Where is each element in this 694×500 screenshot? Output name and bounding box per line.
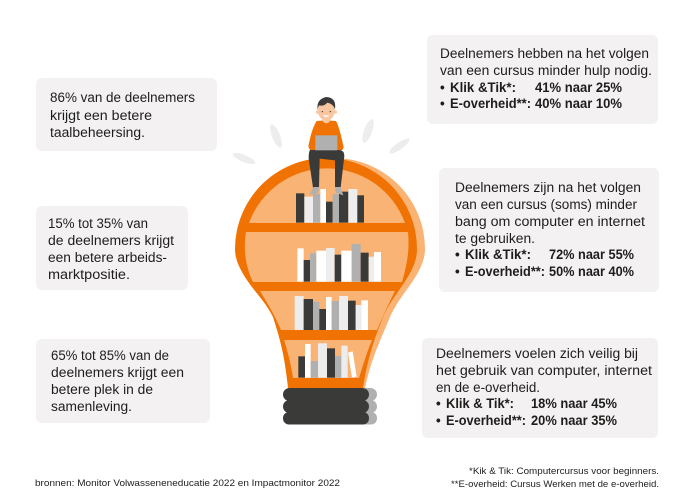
panel: taalbeheersing <box>36 78 217 151</box>
panel: minder hulp nodig: • <box>440 80 445 95</box>
illustration: light bulb bookshelf <box>235 158 425 424</box>
panel: plek in de samenleving: samenleving. <box>51 399 132 414</box>
panel: arbeidsmarktpositie: een betere arbeids- <box>48 250 167 265</box>
panel: minder bang: 72% naar 55% <box>549 247 634 262</box>
panel: veilig: het gebruik van computer, internet <box>436 363 652 378</box>
head <box>318 101 335 121</box>
footnotes: *Kik & Tik: Computercursus voor beginners. <box>469 466 659 477</box>
panel: arbeidsmarktpositie: marktpositie. <box>48 267 130 282</box>
panel: veilig: 20% naar 35% <box>531 413 617 428</box>
bulb screw base <box>283 388 377 424</box>
panel: taalbeheersing: krijgt een betere <box>50 108 152 123</box>
panel: minder bang: • <box>455 264 460 279</box>
panel: minder bang: E-overheid**: <box>465 264 545 279</box>
panel: plek in de samenleving: betere plek in de <box>51 382 153 397</box>
panel: minder bang: Klik &Tik*: <box>465 247 531 262</box>
source note: bronnen: Monitor Volwasseneneducatie 2022 en Impactmonitor 2022 <box>35 478 340 489</box>
footnotes <box>451 466 659 490</box>
neck and ears <box>316 110 319 114</box>
panel: minder bang <box>439 168 659 292</box>
hair <box>317 97 335 110</box>
panel: minder hulp nodig: 41% naar 25% <box>535 80 622 95</box>
panel: minder bang: van een cursus (soms) minder <box>455 197 637 212</box>
panel: arbeidsmarktpositie: de deelnemers krijgt <box>48 233 174 248</box>
panel: arbeidsmarktpositie: 15% tot 35% van <box>48 216 148 231</box>
books: lower shelves <box>295 244 381 378</box>
illustration: person with laptop <box>308 97 344 195</box>
panel: minder hulp nodig: E-overheid**: <box>450 96 531 111</box>
panel: minder bang: • <box>455 247 460 262</box>
panel: veilig <box>422 338 658 438</box>
panel: minder hulp nodig: Deelnemers hebben na het volgen <box>440 46 649 61</box>
panel: veilig: Deelnemers voelen zich veilig bij <box>436 346 638 361</box>
footnotes: **E-overheid: Cursus Werken met de e-overheid. <box>451 479 659 490</box>
panel: minder bang: Deelnemers zijn na het volgen <box>455 180 641 195</box>
panel: veilig: 18% naar 45% <box>531 396 617 411</box>
panel: plek in de samenleving: 65% tot 85% van de <box>51 348 169 363</box>
laptop <box>315 135 337 150</box>
books: top shelf <box>296 189 364 223</box>
panel: minder bang: 50% naar 40% <box>549 264 634 279</box>
panel: minder bang: te gebruiken. <box>455 231 535 246</box>
icon: light rays <box>232 118 411 166</box>
panel: minder hulp nodig: van een cursus minder hulp nodig. <box>440 63 652 78</box>
bulb outline <box>235 158 417 388</box>
panel: minder hulp nodig: • <box>440 96 445 111</box>
shelf compartments <box>245 168 409 378</box>
panel: veilig: • <box>436 413 441 428</box>
panel: minder hulp nodig <box>427 35 658 124</box>
bulb shadow <box>334 158 425 388</box>
panel: minder hulp nodig: Klik &Tik*: <box>450 80 516 95</box>
legs <box>309 150 344 188</box>
panel: veilig: Klik & Tik*: <box>446 396 514 411</box>
panel: veilig: E-overheid**: <box>446 413 526 428</box>
panel: veilig: en de e-overheid. <box>436 380 540 395</box>
panel: minder bang: bang om computer en internet <box>455 214 645 229</box>
shoes <box>309 187 319 195</box>
torso <box>308 121 344 150</box>
panel: taalbeheersing: 86% van de deelnemers <box>50 90 195 105</box>
panel: plek in de samenleving <box>36 339 210 423</box>
panel: taalbeheersing: taalbeheersing. <box>50 125 145 140</box>
panel: minder hulp nodig: 40% naar 10% <box>535 96 622 111</box>
panel: arbeidsmarktpositie <box>36 206 188 290</box>
panel: plek in de samenleving: deelnemers krijgt een <box>51 365 184 380</box>
face <box>322 111 323 112</box>
panel: veilig: • <box>436 396 441 411</box>
